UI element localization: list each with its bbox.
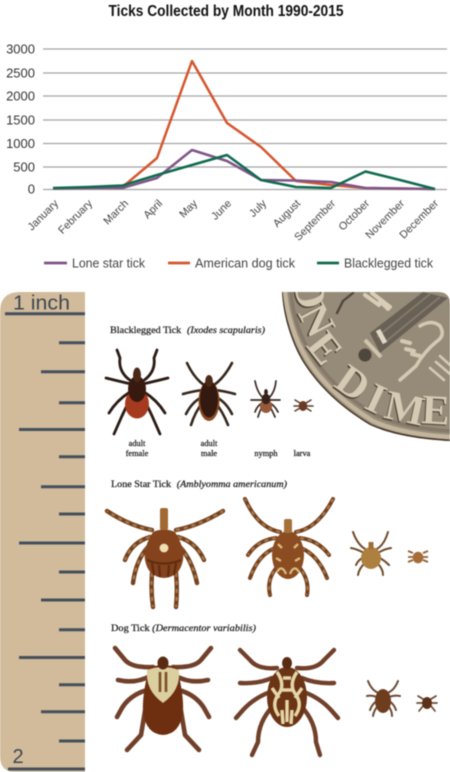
dime lettering shadow <box>293 292 446 428</box>
dime lettering <box>294 291 448 426</box>
dime lettering: D <box>327 356 378 411</box>
labels: blacklegged life stages: male <box>201 449 217 458</box>
tick: lone star nymph <box>351 532 391 575</box>
x-axis month labels: October <box>336 197 372 233</box>
y-axis labels: 0 <box>28 182 35 196</box>
oak branch, motto and olive branch details <box>337 293 450 380</box>
x-axis month labels: September <box>292 197 338 243</box>
x-axis month labels: November <box>363 197 407 241</box>
labels: blacklegged life stages: female <box>126 449 149 458</box>
tick: dog adult male <box>236 650 338 755</box>
tick: blacklegged adult male <box>183 363 235 425</box>
tick: dog larva <box>417 696 437 711</box>
series: Blacklegged tick <box>53 155 435 189</box>
x-axis month labels: August <box>271 198 303 230</box>
x-axis month labels: April <box>141 198 165 221</box>
dime lettering shadow: E <box>419 388 450 436</box>
dime lettering: E <box>420 387 450 435</box>
dime lettering shadow: E <box>296 325 350 375</box>
dime lettering: E <box>297 323 351 374</box>
tick: lone star adult female <box>107 508 223 607</box>
title: Ticks Collected by Month 1990-2015 <box>108 3 344 20</box>
y-axis labels: 2500 <box>6 66 35 80</box>
y-axis labels: 500 <box>13 160 35 174</box>
x-axis month labels: July <box>247 197 270 220</box>
dime lettering: O <box>283 271 335 314</box>
tick: dog nymph <box>367 681 400 716</box>
torch on dime <box>358 292 448 362</box>
series: American dog tick <box>53 61 435 189</box>
x-axis month labels: February <box>56 197 96 237</box>
x-axis month labels: May <box>177 197 201 221</box>
dime photo <box>281 291 450 442</box>
ruler <box>0 292 85 772</box>
y-axis labels: 1000 <box>6 136 35 151</box>
y-axis labels <box>6 42 35 196</box>
x-axis month labels: March <box>101 198 131 227</box>
tick: lone star adult male <box>245 499 333 595</box>
labels: blacklegged life stages: nymph <box>254 449 278 458</box>
chart legend <box>44 256 434 270</box>
x-axis month labels: January <box>25 197 62 233</box>
section heading: blacklegged tick: Blacklegged Tick (Ixodes scapularis) <box>110 325 265 336</box>
ruler label: 1 inch: 1 inch <box>13 292 70 314</box>
x-axis month labels: December <box>397 197 441 241</box>
dime lettering shadow: O <box>281 272 334 315</box>
dime lettering: N <box>289 296 344 345</box>
section heading: lone star tick: Lone Star Tick (Amblyomma americanum) <box>111 479 287 490</box>
tick: blacklegged adult female <box>106 350 168 434</box>
labels: blacklegged life stages <box>126 439 311 458</box>
y-axis labels: 2000 <box>6 88 35 104</box>
series: Lone star tick <box>53 150 435 189</box>
dime lettering shadow: D <box>326 358 377 413</box>
line chart: ticks collected by month <box>6 42 447 243</box>
y-axis labels: 3000 <box>6 42 35 56</box>
x-axis month labels <box>25 197 441 243</box>
dime lettering shadow: N <box>287 297 342 345</box>
section heading: dog tick: Dog Tick (Dermacentor variabilis) <box>111 623 256 634</box>
tick: lone star larva <box>408 551 428 563</box>
x-axis month labels: June <box>209 198 234 223</box>
ruler label: 2: 2 <box>12 746 24 768</box>
tick: blacklegged larva <box>294 400 313 411</box>
dime lettering: M <box>381 382 429 436</box>
chart legend: Lone star tick <box>72 256 146 270</box>
dime lettering: I <box>358 375 393 424</box>
tick: dog adult female <box>115 648 211 750</box>
chart legend: Blacklegged tick <box>344 256 434 270</box>
labels: blacklegged life stages: adult <box>129 439 146 448</box>
y-axis labels: 1500 <box>6 112 35 128</box>
tick: blacklegged nymph <box>251 381 280 417</box>
labels: blacklegged life stages: larva <box>294 449 311 458</box>
dime lettering shadow: I <box>357 376 392 425</box>
dime lettering shadow: M <box>380 384 428 437</box>
chart legend: American dog tick <box>195 256 296 270</box>
labels: blacklegged life stages: adult <box>201 439 218 448</box>
